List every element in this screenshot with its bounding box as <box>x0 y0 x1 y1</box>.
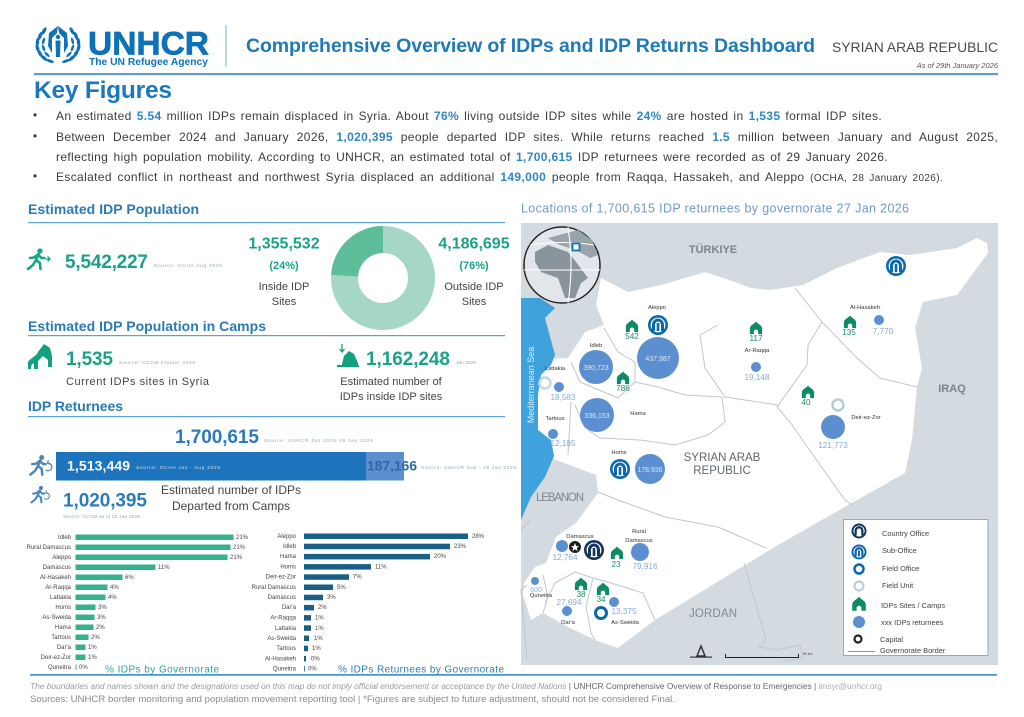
map: Syria territory <box>523 238 988 648</box>
bar chart: % IDPs by Governorate: Deir-ez-Zor <box>41 655 71 661</box>
bar chart: % IDPs Returnees by Governorate: 20% <box>434 554 447 560</box>
governorate labels: Damascus <box>566 534 594 540</box>
camp counts <box>576 328 856 604</box>
bar chart: % IDPs Returnees by Governorate: 5% <box>337 585 346 591</box>
camp counts: 40 <box>801 398 811 407</box>
bar chart: % IDPs Returnees by Governorate: 1% <box>314 636 323 642</box>
returnee values: 12,764 <box>552 553 578 562</box>
bar chart: % IDPs Returnees by Governorate <box>252 534 504 676</box>
bar chart: % IDPs Returnees by Governorate: 11% <box>375 564 387 570</box>
map title: Locations of 1,700,615 IDP returnees by governorate 27 Jan 2026 <box>521 202 909 216</box>
bar chart: % IDPs by Governorate: 1% <box>88 645 97 651</box>
bar chart: % IDPs by Governorate: 21% <box>233 545 246 551</box>
bar chart: % IDPs by Governorate: Damascus <box>43 565 71 571</box>
bar chart: % IDPs by Governorate: Aleppo <box>52 555 72 561</box>
caption: Departed from Camps <box>172 499 290 513</box>
returnee values <box>530 327 894 616</box>
stacked bar: 187,166 <box>367 458 417 474</box>
bar chart: % IDPs Returnees by Governorate: Ar-Raqqa <box>270 616 297 622</box>
returnee values: 7,770 <box>873 327 894 336</box>
heading: Estimated IDP Population <box>28 201 199 217</box>
scale bar <box>725 652 813 658</box>
icon: person moving <box>28 248 50 269</box>
outside IDP sites figure: Outside IDP <box>444 281 504 293</box>
camp icons <box>575 316 856 595</box>
bar chart: % IDPs by Governorate: Idleb <box>58 535 72 541</box>
bar chart: % IDPs by Governorate: Hama <box>55 625 72 631</box>
icon: returning person <box>31 486 49 502</box>
legend item: Capital: Capital <box>880 635 903 644</box>
bullet 2 line 2: reflecting high population mobility. According to UNHCR, an estimated total of 1,700,615 IDP returnees were recorded as of 29 January 2026. <box>56 150 888 164</box>
inset globe <box>524 227 600 303</box>
bar chart: % IDPs by Governorate: 1% <box>88 655 97 661</box>
legend item: IDPs Sites / Camps: IDPs Sites / Camps <box>881 601 945 610</box>
bar chart: % IDPs by Governorate: Ar-Raqqa <box>45 585 72 591</box>
country labels: SYRIAN ARAB <box>684 452 761 464</box>
bar chart: % IDPs by Governorate: 3% <box>97 615 106 621</box>
bar chart: % IDPs Returnees by Governorate: Quneitra <box>273 666 297 672</box>
stacked bar: Source: OCHA Jan - Aug 2025 <box>136 465 220 471</box>
country labels: JORDAN <box>689 608 737 620</box>
outside IDP sites figure: (76%) <box>459 260 489 272</box>
bar chart: % IDPs by Governorate: Homs <box>55 605 71 611</box>
bar chart: % IDPs by Governorate: As-Sweida <box>42 615 72 621</box>
country labels: Mediterranean Sea <box>526 347 536 423</box>
section: IDP Returnees <box>28 398 516 520</box>
bar chart: % IDPs by Governorate: 6% <box>125 575 134 581</box>
returnee circles <box>531 315 884 616</box>
bar chart: % IDPs Returnees by Governorate: Tartous <box>276 646 296 652</box>
caption: IDPs inside IDP sites <box>340 391 443 403</box>
governorate labels: Lattakia <box>545 366 566 372</box>
outside IDP sites figure <box>438 236 510 308</box>
bar chart: % IDPs Returnees by Governorate: Lattakia <box>275 626 297 632</box>
UNHCR offices <box>540 256 906 618</box>
bar chart: % IDPs Returnees by Governorate: As-Sweida <box>267 636 297 642</box>
bar chart: % IDPs by Governorate: 2% <box>96 625 105 631</box>
bar chart: % IDPs Returnees by Governorate: Idleb <box>283 544 297 550</box>
legend item: Field Office: Field Office <box>882 564 919 573</box>
legend <box>844 520 988 656</box>
total IDP figure: 5,542,227 <box>65 252 148 273</box>
map: Mediterranean Sea <box>521 298 555 520</box>
governorate labels: Rural <box>632 529 646 535</box>
governorate labels <box>530 305 881 626</box>
icon: camp tents <box>28 344 52 369</box>
legend item: Field Unit: Field Unit <box>882 581 913 590</box>
bar chart: % IDPs by Governorate: Dar'a <box>57 645 72 651</box>
header logo: UNHCR <box>35 26 209 68</box>
bar chart: % IDPs by Governorate: 3% <box>98 605 107 611</box>
bar chart: % IDPs by Governorate: 21% <box>236 535 249 541</box>
caption: Estimated number of IDPs <box>161 483 301 497</box>
legend item: Sub-Office: Sub-Office <box>882 546 917 555</box>
caption: Estimated number of <box>340 376 443 388</box>
inside IDP sites figure <box>248 236 320 308</box>
camp counts: 38 <box>576 590 586 599</box>
bar chart: % IDPs by Governorate: 11% <box>158 565 170 571</box>
outside IDP sites figure: 4,186,695 <box>438 236 510 252</box>
logo wordmark: UNHCR <box>88 26 209 62</box>
returnee values: 437,987 <box>645 356 671 363</box>
returnee values: 27,694 <box>556 598 582 607</box>
source note: Jan 2026 <box>456 360 476 366</box>
camp sites figure: 1,535 <box>66 349 113 370</box>
returnee values: 19,148 <box>744 373 770 382</box>
governorate labels: Damascus <box>625 538 653 544</box>
bar chart: % IDPs by Governorate: 4% <box>110 585 119 591</box>
map: Syria returnees by governorate <box>521 223 998 665</box>
outside IDP sites figure: Sites <box>462 296 487 308</box>
legend item: Field Unit <box>854 581 913 590</box>
legend item: Field Office <box>854 564 919 574</box>
bar chart: % IDPs Returnees by Governorate: Rural Damascus <box>252 585 296 591</box>
key figures text: • <box>33 110 37 122</box>
bar chart: % IDPs Returnees by Governorate: Damascus <box>268 595 296 601</box>
country labels: REPUBLIC <box>693 465 751 477</box>
returnee values: 178,936 <box>637 467 663 474</box>
legend item: Governorate Border <box>848 646 946 655</box>
chart caption: % IDPs Returnees by Governorate <box>338 664 504 676</box>
legend item: Capital <box>854 635 903 644</box>
stacked bar: 1,513,449 <box>67 458 130 474</box>
returnee values: 600 <box>530 587 542 594</box>
stacked bar: Source: UNHCR Sep - 29 Jan 2026 <box>421 465 516 471</box>
returnee values: 336,153 <box>584 413 610 420</box>
camp counts: 34 <box>596 595 606 604</box>
bar chart: % IDPs Returnees by Governorate: Homs <box>280 564 296 570</box>
heading: Estimated IDP Population in Camps <box>28 318 266 334</box>
bar chart: % IDPs by Governorate: Quneitra <box>48 665 72 671</box>
caption <box>161 483 301 513</box>
source note: Source: CCCM as of 23 Jan 2026 <box>63 514 140 520</box>
governorate labels: Quneitra <box>530 593 553 599</box>
bar chart: % IDPs by Governorate: 4% <box>108 595 117 601</box>
key figures text: • <box>33 130 37 142</box>
inside IDP sites figure: 1,355,532 <box>248 236 320 252</box>
bar chart: % IDPs Returnees by Governorate: 0% <box>311 656 320 662</box>
country labels: TÜRKIYE <box>689 243 737 256</box>
governorate labels: Idleb <box>590 343 602 349</box>
bar chart: % IDPs by Governorate: 0% <box>79 665 88 671</box>
governorate labels: Deir-ez-Zor <box>851 415 881 421</box>
bar chart: % IDPs Returnees by Governorate: 1% <box>315 626 324 632</box>
caption: Current IDPs sites in Syria <box>66 376 210 388</box>
legend item: Country Office <box>852 524 929 538</box>
governorate labels: Homs <box>611 450 627 456</box>
heading: Key Figures: Key Figures <box>34 77 172 104</box>
IDPs in sites figure: 1,162,248 <box>366 349 450 370</box>
governorate labels: Al-Hasakeh <box>850 305 880 311</box>
bar chart: % IDPs Returnees by Governorate: Hama <box>280 554 297 560</box>
legend item: Country Office: Country Office <box>882 529 929 538</box>
bar chart: % IDPs by Governorate <box>27 534 249 676</box>
legend item: IDPs Sites / Camps <box>852 597 945 611</box>
bar chart: % IDPs Returnees by Governorate: 7% <box>353 574 362 580</box>
date: As of 29th January 2026 <box>916 61 999 70</box>
bar chart: % IDPs by Governorate: 21% <box>230 555 243 561</box>
bar chart: % IDPs Returnees by Governorate: 0% <box>308 666 317 672</box>
scale bar: 50 km <box>803 652 813 656</box>
bar chart: % IDPs Returnees by Governorate: 1% <box>315 616 324 622</box>
chart caption: % IDPs by Governorate <box>105 664 219 676</box>
footer disclaimer: The boundaries and names shown and the designations used on this map do not imply official endorsement or acceptance by the United Nations | UNHCR Comprehensive Overview of Response to Emergencies | imsyr@unhcr.org <box>30 682 882 691</box>
bar chart: % IDPs Returnees by Governorate: 28% <box>472 534 485 540</box>
key figures text <box>33 109 998 184</box>
bar chart: % IDPs Returnees by Governorate: Al-Hasakeh <box>265 656 296 662</box>
total returnees figure: 1,700,615 <box>175 427 259 448</box>
inside IDP sites figure: Inside IDP <box>259 281 309 293</box>
legend item: Governorate Border: Governorate Border <box>880 646 946 655</box>
country labels: IRAQ <box>938 383 966 395</box>
key figures text: • <box>33 171 37 183</box>
returnee values: 79,916 <box>632 562 658 571</box>
governorate labels: Aleppo <box>648 305 666 311</box>
bar chart: % IDPs Returnees by Governorate: Dar'a <box>282 605 297 611</box>
camp counts: 117 <box>749 334 763 343</box>
legend item: IDPs returnees: xxx IDPs returnees <box>881 618 944 627</box>
camp counts: 135 <box>842 328 856 337</box>
returnee values: 390,723 <box>583 365 609 372</box>
bar chart: % IDPs Returnees by Governorate: Deir-ez-Zor <box>266 574 296 580</box>
governorate labels: As-Sweida <box>611 620 640 626</box>
bar chart: % IDPs by Governorate: Lattakia <box>50 595 72 601</box>
caption <box>340 376 443 403</box>
footer sources: Sources: UNHCR border monitoring and population movement reporting tool | *Figures are subject to future adjustment, should not be considered Final. <box>30 694 675 704</box>
logo tagline: The UN Refugee Agency <box>89 56 208 68</box>
returnee values: 13,375 <box>611 607 637 616</box>
stacked bar <box>56 452 516 480</box>
icon: UNHCR wreath and sheltering hands <box>35 26 81 64</box>
legend item: IDPs returnees <box>853 616 944 628</box>
section: Estimated IDP Population <box>28 201 510 316</box>
inside IDP sites figure: (24%) <box>269 260 299 272</box>
returnee values: 121,773 <box>818 441 848 450</box>
icon: people entering camp <box>337 344 359 367</box>
camp counts: 542 <box>625 332 639 341</box>
returnee values: 18,583 <box>550 393 576 402</box>
governorate labels: Tartous <box>545 416 565 422</box>
departed figure: 1,020,395 <box>63 490 147 512</box>
camp counts: 23 <box>611 560 621 569</box>
governorate labels: Hama <box>630 411 647 417</box>
heading: IDP Returnees <box>28 398 123 414</box>
governorate labels: Dar'a <box>561 620 576 626</box>
bullet 1: An estimated 5.54 million IDPs remain displaced in Syria. About 76% living outside IDP sites while 24% are hosted in 1,535 formal IDP sites. <box>56 109 882 123</box>
bar chart: % IDPs by Governorate: Rural Damascus <box>27 545 71 551</box>
icon: north arrow <box>690 646 712 658</box>
returnee values: 12,185 <box>550 439 576 448</box>
section: Estimated IDP Population in Camps <box>28 318 505 403</box>
source note: Source: UNHCR Jan 2025-29 Jan 2026 <box>264 438 373 444</box>
bar chart: % IDPs Returnees by Governorate: Aleppo <box>277 534 297 540</box>
bar chart: % IDPs by Governorate: 2% <box>91 635 100 641</box>
country labels <box>526 243 966 620</box>
icon: returning person <box>30 455 52 475</box>
bar chart: % IDPs by Governorate: Al-Hasakeh <box>40 575 71 581</box>
bar chart: % IDPs by Governorate: Tartous <box>51 635 71 641</box>
country labels: LEBANON <box>536 492 584 504</box>
bar chart: % IDPs Returnees by Governorate: 2% <box>318 605 327 611</box>
bullet 3: Escalated conflict in northeast and northwest Syria displaced an additional 149,000 people from Raqqa, Hassakeh, and Aleppo (OCHA, 28 January 2026). <box>56 170 943 184</box>
source note: Source: CCCM Cluster 2026 <box>119 360 195 366</box>
inside IDP sites figure: Sites <box>272 296 297 308</box>
camp counts: 786 <box>616 384 630 393</box>
title: Comprehensive Overview of IDPs and IDP Returns Dashboard <box>246 35 815 57</box>
governorate labels: Ar-Raqqa <box>745 348 770 354</box>
source note: Source: OCHA Aug 2025 <box>154 263 222 269</box>
donut chart <box>344 240 422 316</box>
legend item: Sub-Office <box>852 544 917 560</box>
bar chart: % IDPs Returnees by Governorate: 1% <box>312 646 321 652</box>
bar chart: % IDPs Returnees by Governorate: 23% <box>454 544 467 550</box>
bar chart: % IDPs Returnees by Governorate: 3% <box>327 595 336 601</box>
country name: SYRIAN ARAB REPUBLIC <box>832 40 998 55</box>
bullet 2 line 1: Between December 2024 and January 2026, 1,020,395 people departed IDP sites. While returns reached 1.5 million between January and August 2025, <box>56 130 998 144</box>
